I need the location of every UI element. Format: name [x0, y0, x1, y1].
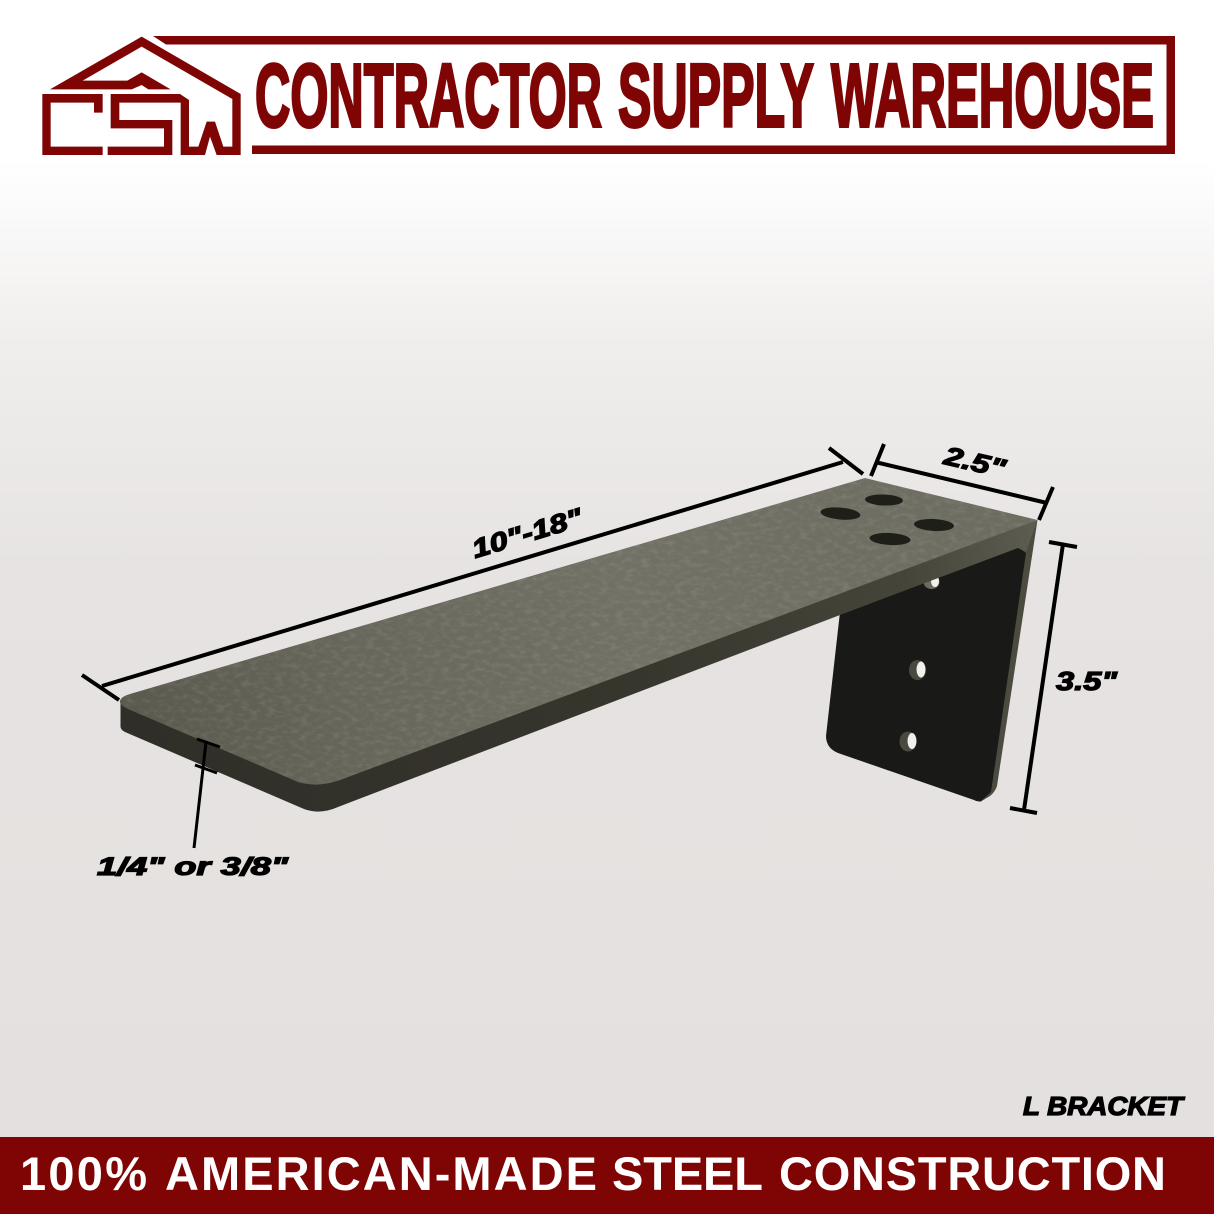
banner text: [20, 1147, 1166, 1200]
header logo: Contractor Supply Warehouse: [42, 36, 1175, 155]
dimension: height: [1010, 542, 1118, 813]
vertical flange outer side: [975, 520, 1038, 802]
banner background: [0, 1137, 1214, 1214]
L bracket product illustration: [120, 478, 1037, 812]
plate mounting holes: [820, 494, 954, 546]
plate top surface: [120, 478, 1037, 785]
label: 2.5 inches: 2.5": [940, 440, 1009, 484]
dimension: width: [871, 440, 1053, 520]
footer banner: [0, 1137, 1214, 1214]
banner text: STEEL: [612, 1147, 763, 1200]
plate front edge thickness: [120, 520, 1038, 812]
vertical flange black face: [826, 547, 1026, 801]
product label: L BRACKET: [1023, 1091, 1185, 1121]
header frame: [153, 36, 1175, 154]
banner text: CONSTRUCTION: [779, 1147, 1166, 1200]
plate surface texture: [120, 478, 1037, 785]
label: 3.5 inches: 3.5": [1056, 666, 1118, 696]
flange holes: [900, 575, 940, 752]
dimension: thickness: [97, 739, 290, 881]
label: 10-18 inches: 10"-18": [468, 502, 587, 564]
brand name: SUPPLY: [618, 46, 814, 146]
dimension: length: [82, 448, 863, 700]
label: 1/4 or 3/8 inches: 1/4" or 3/8": [97, 853, 290, 881]
banner text: AMERICAN-MADE: [165, 1147, 597, 1200]
icon: CSW house mark: [42, 37, 241, 155]
banner text: 100%: [20, 1147, 147, 1200]
brand name: CONTRACTOR: [255, 46, 602, 146]
